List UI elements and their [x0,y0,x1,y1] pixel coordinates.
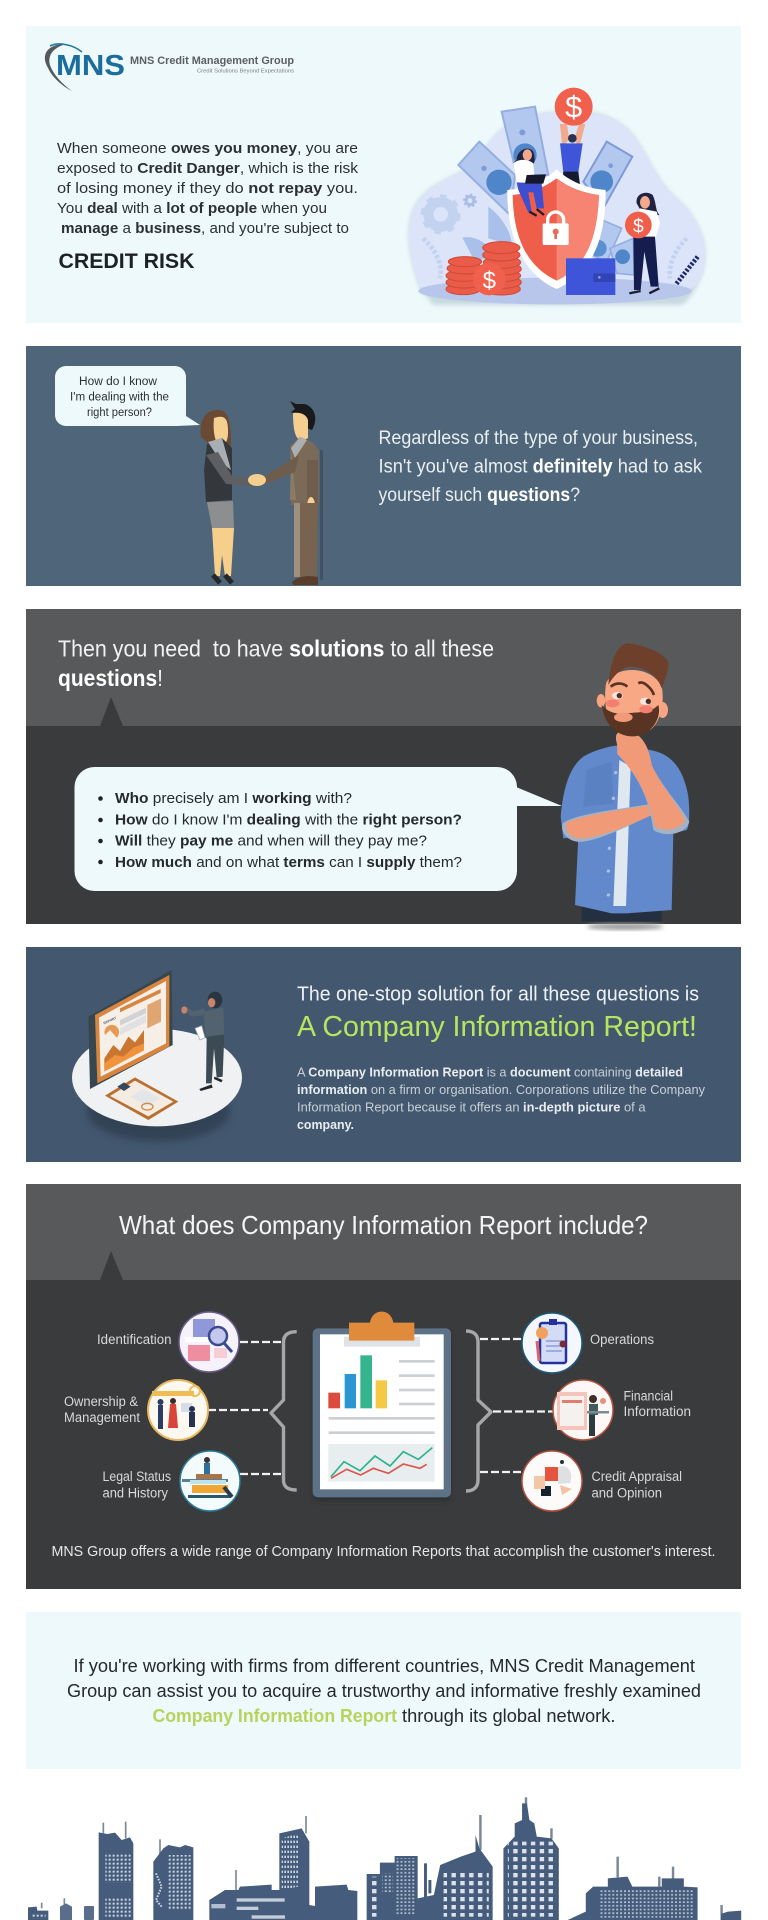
panel: solutions to questions [26,609,741,930]
callout text: Company Information Report [152,1706,397,1726]
icon: identification [179,1312,239,1372]
intro text: exposed to Credit Danger, which is the risk [57,160,359,177]
bar chart [328,1355,387,1408]
speech bubble: question list [74,767,562,891]
icon: credit appraisal and opinion [522,1451,582,1511]
speech bubble: question list: Who precisely am I working with? [115,790,352,807]
seated woman with laptop [513,149,546,216]
illustration: report board on disc: REPORT [103,1016,117,1025]
logo: MNS Credit Management Group: MNS Credit Management Group [130,55,294,67]
heading: solutions: questions! [58,665,163,691]
diagram labels: Management [64,1410,140,1425]
diagram labels: Ownership & [64,1394,138,1409]
icon: ownership and management [148,1380,208,1440]
wallet [566,258,615,295]
speech bubble: question list: Will they pay me and when will they pay me? [115,832,427,850]
skyline: right buildings [367,1797,741,1920]
logo: MNS Credit Management Group [45,44,294,91]
person holding coin: $ [565,91,582,125]
text: regardless of business: Isn't you've almost definitely had to ask [378,456,702,478]
illustration: clipboard report [313,1312,451,1501]
intro text: You deal with a lot of people when you [57,200,327,217]
callout text: If you're working with firms from different countries, MNS Credit Management [74,1656,695,1676]
callout text: Group can assist you to acquire a trustworthy and informative freshly examined [67,1681,701,1701]
intro text [57,140,359,237]
body text: company. [297,1118,354,1132]
speech bubble: question list: How do I know I'm dealing with the right person? [115,812,462,828]
coin stacks [446,242,521,295]
body text [297,1066,706,1132]
connectors and braces [208,1331,553,1491]
heading: one-stop solution: The one-stop solution for all these questions is [297,984,699,1006]
logo: MNS Credit Management Group: Credit Solutions Beyond Expectations [197,68,294,74]
diagram labels: Financial [624,1388,673,1404]
illustration: shield, money and people [409,88,705,305]
diagram labels [64,1332,691,1500]
heading: credit risk: CREDIT RISK [58,250,194,273]
illustration: woman [201,410,252,583]
skyline: left buildings [28,1816,357,1920]
footer sentence: MNS Group offers a wide range of Company Information Reports that accomplish the customer's interest. [52,1544,716,1560]
panel: questions handshake [26,346,741,586]
heading: solutions: Then you need to have solutions to all these [58,636,494,662]
intro text: manage a business, and you're subject to [61,220,349,237]
heading: company information report: A Company Information Report! [297,1011,697,1043]
icon: operations [522,1313,582,1373]
clipboard on disc [105,1077,178,1120]
diagram labels: and History [102,1486,168,1500]
text: regardless of business [378,428,702,506]
speech bubble: question list: How much and on what terms can I supply them? [115,854,462,871]
diagram labels: Information [624,1404,691,1419]
speech bubble: I'm dealing with the [70,392,169,404]
woman holding coin [625,193,660,293]
panel: what the report includes [26,1184,741,1589]
panel: credit risk intro [26,26,741,323]
shield with padlock [507,169,606,289]
body text: A Company Information Report is a document containing detailed [297,1066,683,1080]
diagram labels: Credit Appraisal [592,1469,682,1484]
panel: global network callout [26,1612,741,1769]
diagram labels: Legal Status [102,1469,171,1484]
coin stacks: $ [483,267,496,294]
intro text: of losing money if they do not repay you. [57,180,358,197]
diagram labels: Operations [590,1332,654,1347]
callout text: through its global network. [402,1706,616,1726]
speech bubble: How do I know [79,376,158,388]
heading: what does it include: What does Company Information Report include? [119,1210,648,1240]
text: regardless of business: Regardless of the type of your business, [378,428,698,449]
presenter [181,992,224,1091]
callout text [67,1656,701,1726]
heading: solutions [58,636,494,691]
icon: legal status and history [180,1451,240,1511]
city skyline [28,1797,741,1920]
speech bubble: right person? [87,407,152,419]
line chart [328,1444,435,1482]
logo: MNS Credit Management Group: MNS [56,50,125,82]
body text: information on a firm or organisation. Corporations utilize the Company [297,1083,706,1097]
panel: one-stop solution [26,947,741,1162]
speech bubble [55,366,200,426]
text: regardless of business: yourself such questions? [378,485,580,506]
illustration: report board on disc [72,970,242,1142]
person holding coin [555,88,593,185]
intro text: When someone owes you money , you are [57,140,358,157]
illustration: man [248,401,323,585]
diagram labels: and Opinion [592,1486,662,1500]
icon: financial information [553,1380,613,1440]
diagram labels: Identification [97,1332,172,1347]
illustration: thinking man [561,643,689,930]
woman holding coin: $ [633,216,644,237]
body text: Information Report because it offers an in-depth picture of a [297,1100,646,1114]
